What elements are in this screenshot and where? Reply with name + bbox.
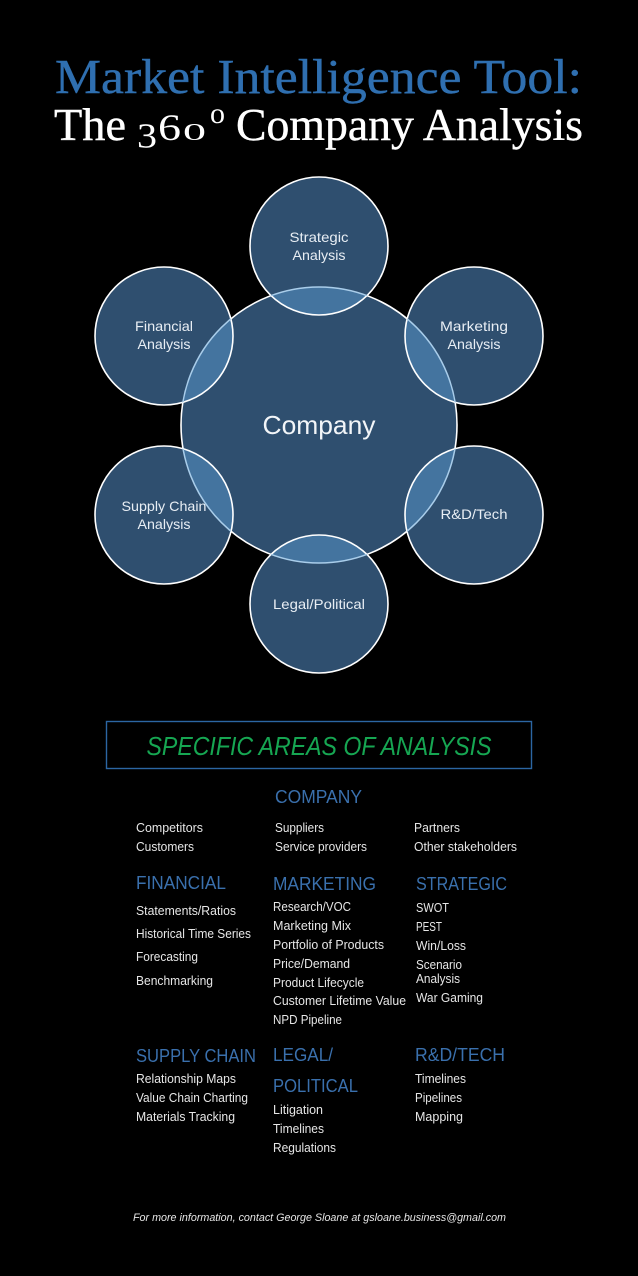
- section: supply chain: Value Chain Charting: [136, 1091, 248, 1105]
- title: Market Intelligence Tool:: [55, 49, 582, 104]
- section: supply chain: Materials Tracking: [136, 1110, 235, 1124]
- section: legal/political: Regulations: [273, 1141, 336, 1155]
- section: legal/political: Litigation: [273, 1103, 323, 1117]
- section: marketing: MARKETING: [273, 873, 376, 894]
- section: supply chain: Relationship Maps: [136, 1072, 236, 1086]
- section: company: Customers: [136, 840, 194, 854]
- circle: R&D/Tech: [405, 446, 543, 584]
- company outline inside overlaps: [181, 287, 457, 563]
- section: R&D/tech: Timelines: [415, 1072, 466, 1086]
- section: strategic: Scenario: [416, 958, 462, 972]
- section: marketing: Product Lifecycle: [273, 976, 364, 990]
- title: Company Analysis: [236, 100, 583, 150]
- section: company: Other stakeholders: [414, 840, 517, 854]
- circle: financial analysis: [95, 267, 233, 405]
- title: 6: [158, 108, 181, 149]
- section: R&D/tech: R&D/TECH: [415, 1044, 505, 1065]
- section: supply chain: SUPPLY CHAIN: [136, 1045, 256, 1066]
- circle: marketing analysis: [405, 267, 543, 405]
- section: supply chain: [136, 1045, 256, 1124]
- section: marketing: Research/VOC: [273, 900, 351, 914]
- circle: company: [181, 287, 457, 563]
- title: The: [54, 100, 126, 150]
- section: company: [136, 786, 517, 854]
- circle: supply chain analysis: Analysis: [138, 516, 190, 532]
- section: R&D/tech: Pipelines: [415, 1091, 462, 1105]
- heading box: specific areas of analysis: SPECIFIC AREAS OF ANALYSIS: [146, 731, 492, 761]
- diagram: 360 company analysis: [95, 177, 543, 673]
- circle: supply chain analysis: Supply Chain: [122, 498, 206, 514]
- section: marketing: [273, 873, 406, 1027]
- circle: legal/political: [250, 535, 388, 673]
- section: legal/political: Timelines: [273, 1122, 324, 1136]
- section: legal/political: [273, 1044, 358, 1155]
- section: financial: FINANCIAL: [136, 872, 226, 893]
- title: o: [210, 97, 225, 130]
- section: marketing: Marketing Mix: [273, 919, 352, 933]
- section: strategic: STRATEGIC: [416, 873, 507, 894]
- section: company: Suppliers: [275, 821, 324, 835]
- heading box: specific areas of analysis: [106, 722, 532, 768]
- section: strategic: SWOT: [416, 901, 449, 915]
- circle: strategic analysis: Analysis: [292, 247, 346, 263]
- section: company: Service providers: [275, 840, 367, 854]
- circle: supply chain analysis: [95, 446, 233, 584]
- circle: legal/political: Legal/Political: [273, 596, 365, 612]
- title: 3: [137, 116, 157, 156]
- section: company: COMPANY: [275, 786, 362, 807]
- section: legal/political: POLITICAL: [273, 1075, 358, 1096]
- section: financial: Statements/Ratios: [136, 904, 236, 918]
- section: financial: Forecasting: [136, 950, 198, 964]
- title: [54, 49, 583, 156]
- section: R&D/tech: [415, 1044, 505, 1124]
- circle: company: Company: [262, 410, 376, 440]
- circle: financial analysis: Financial: [135, 318, 193, 334]
- section: financial: [136, 872, 251, 988]
- section: company: Competitors: [136, 821, 203, 835]
- section: strategic: [416, 873, 507, 1005]
- circle: financial analysis: Analysis: [138, 336, 190, 352]
- section: strategic: PEST: [416, 920, 442, 934]
- circle: strategic analysis: [250, 177, 388, 315]
- section: marketing: Price/Demand: [273, 957, 350, 971]
- title: 0: [183, 120, 206, 146]
- section: marketing: Portfolio of Products: [273, 938, 384, 952]
- section: marketing: Customer Lifetime Value: [273, 994, 406, 1008]
- circle: R&D/Tech: R&D/Tech: [440, 506, 508, 522]
- section: strategic: War Gaming: [416, 991, 483, 1005]
- section: company: Partners: [414, 821, 460, 835]
- section: R&D/tech: Mapping: [415, 1110, 463, 1124]
- footer contact note: For more information, contact George Sloane at gsloane.business@gmail.com: [133, 1212, 506, 1224]
- section: strategic: Analysis: [416, 972, 460, 986]
- section: financial: Historical Time Series: [136, 927, 251, 941]
- circle: marketing analysis: Marketing: [440, 318, 508, 334]
- section: legal/political: LEGAL/: [273, 1044, 334, 1065]
- section: strategic: Win/Loss: [416, 939, 466, 953]
- circle: marketing analysis: Analysis: [448, 336, 500, 352]
- section: financial: Benchmarking: [136, 974, 213, 988]
- circle: strategic analysis: Strategic: [290, 229, 348, 245]
- section: marketing: NPD Pipeline: [273, 1013, 342, 1027]
